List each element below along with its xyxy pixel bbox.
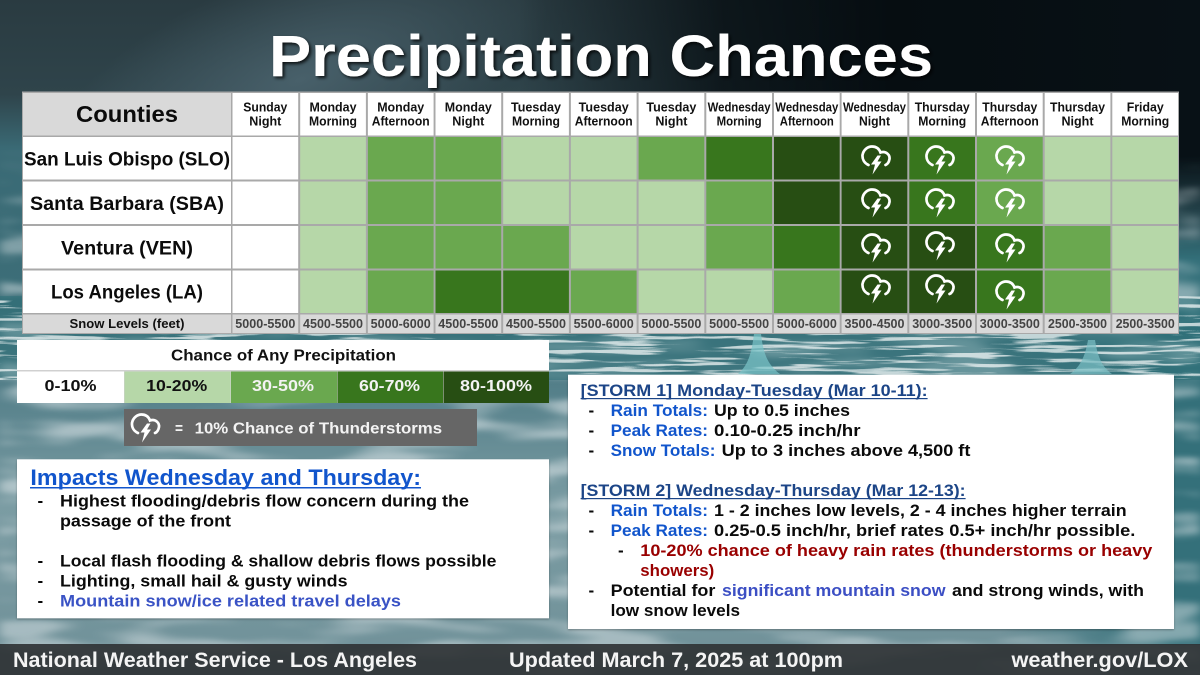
table header row: Night: [249, 115, 282, 129]
row: snow levels: 4500-5500: [506, 317, 566, 331]
row: snow levels: 5500-6000: [574, 317, 634, 331]
footer bar: National Weather Service - Los Angeles: [13, 649, 417, 672]
row: Santa Barbara: [23, 182, 1178, 224]
storm 2 details: 0.25-0.5 inch/hr, brief rates 0.5+ inch/hr possible.: [714, 521, 1135, 540]
storm 2 details: -: [588, 581, 594, 600]
table header row: Wednesday: [775, 101, 838, 115]
table header row: Thursday: [1050, 101, 1105, 115]
table header row: Thursday: [915, 101, 970, 115]
storm 2 details: 10-20% chance of heavy rain rates (thunderstorms or heavy: [640, 541, 1153, 560]
impacts list: Lighting, small hail & gusty winds: [60, 572, 348, 591]
table header row: Friday: [1127, 101, 1164, 115]
table header row: Tuesday: [646, 101, 696, 115]
impacts list: -: [38, 572, 43, 591]
table header row: Morning: [309, 115, 357, 129]
impacts list: [38, 492, 496, 611]
storm 2 details: showers): [640, 561, 714, 580]
legend: chance of any precipitation: 10-20%: [146, 378, 207, 395]
storm 2 details: and strong winds, with: [952, 581, 1144, 600]
table header row: Monday: [310, 101, 357, 115]
row: snow levels: 2500-3500: [1116, 317, 1175, 331]
table header row: Afternoon: [575, 115, 633, 129]
storm 2 details: Potential for: [611, 581, 716, 600]
storm 2 details: [STORM 2] Wednesday-Thursday (Mar 12-13):: [581, 481, 966, 500]
footer bar: [0, 644, 1200, 675]
row: snow levels: 5000-6000: [371, 317, 431, 331]
storm 1 details: -: [588, 441, 594, 460]
storm 2 details: low snow levels: [611, 601, 740, 620]
impacts list: passage of the front: [60, 512, 231, 531]
table header row: [23, 93, 1178, 136]
storm 1 details: Up to 0.5 inches: [714, 401, 850, 420]
legend: thunderstorm icon key: =: [175, 421, 183, 438]
table header row: Morning: [1121, 115, 1169, 129]
impacts list: Highest flooding/debris flow concern during the: [60, 492, 469, 511]
table header row: Night: [655, 115, 688, 129]
footer bar: Updated March 7, 2025 at 100pm: [509, 649, 843, 672]
storm 1 details: [STORM 1] Monday-Tuesday (Mar 10-11):: [581, 381, 928, 400]
panel: impacts Wednesday and Thursday: [17, 459, 549, 618]
storm 2 details: Peak Rates:: [611, 521, 708, 540]
legend: chance of any precipitation: Chance of Any Precipitation: [171, 347, 396, 364]
storm 1 details: [581, 381, 971, 460]
table header row: Wednesday: [708, 101, 771, 115]
storm 1 details: Rain Totals:: [611, 401, 708, 420]
storm 2 details: Rain Totals:: [611, 501, 708, 520]
table header row: Monday: [445, 101, 492, 115]
table header row: Tuesday: [579, 101, 629, 115]
row: Ventura: Ventura (VEN): [61, 238, 193, 259]
storm 1 details: 0.10-0.25 inch/hr: [714, 421, 861, 440]
table header row: Night: [859, 115, 891, 129]
storm 2 details: [581, 481, 1153, 620]
storm 1 details: Snow Totals:: [611, 441, 715, 460]
row: snow levels: 3000-3500: [912, 317, 972, 331]
table header row: Afternoon: [372, 115, 430, 129]
table header row: Wednesday: [843, 101, 906, 115]
row: Los Angeles: Los Angeles (LA): [51, 283, 203, 304]
row: snow levels: 5000-5500: [641, 317, 701, 331]
row: snow levels: 5000-6000: [777, 317, 837, 331]
row: snow levels: 5000-5500: [709, 317, 769, 331]
legend: chance of any precipitation: [17, 340, 549, 403]
legend: thunderstorm icon key: [124, 409, 477, 446]
storm 1 details: Up to 3 inches above 4,500 ft: [722, 441, 971, 460]
row: snow levels: 5000-5500: [235, 317, 295, 331]
storm 2 details: significant mountain snow: [722, 581, 946, 600]
storm 1 details: -: [588, 401, 594, 420]
legend: chance of any precipitation: 80-100%: [460, 378, 532, 395]
row: snow levels: 4500-5500: [438, 317, 498, 331]
row: Santa Barbara: Santa Barbara (SBA): [30, 194, 224, 215]
impacts list: Mountain snow/ice related travel delays: [60, 592, 401, 611]
table header row: Sunday: [243, 101, 287, 115]
legend: chance of any precipitation: 0-10%: [44, 378, 96, 395]
impacts list: -: [38, 492, 43, 511]
storm 1 details: -: [588, 421, 594, 440]
row: Ventura: [23, 226, 1178, 268]
legend: chance of any precipitation: 60-70%: [359, 378, 420, 395]
storm 2 details: -: [618, 541, 624, 560]
legend: thunderstorm icon key: 10% Chance of Thunderstorms: [195, 421, 442, 438]
row: Los Angeles: [23, 270, 1178, 313]
table header row: Night: [452, 115, 485, 129]
table header row: Afternoon: [780, 115, 834, 129]
row: snow levels: 3000-3500: [980, 317, 1040, 331]
panel: storm details: [568, 375, 1174, 629]
storm 2 details: 1 - 2 inches low levels, 2 - 4 inches higher terrain: [714, 501, 1127, 520]
row: snow levels: 2500-3500: [1048, 317, 1107, 331]
table header row: Morning: [918, 115, 966, 129]
row: snow levels: [23, 314, 1178, 333]
row: San Luis Obispo: [23, 137, 1178, 180]
title: Precipitation Chances: [269, 24, 933, 89]
impacts list: -: [38, 552, 43, 571]
precipitation chances table: [22, 92, 1179, 334]
row: snow levels: Snow Levels (feet): [70, 317, 184, 331]
table header row: Thursday: [982, 101, 1037, 115]
table header row: Afternoon: [981, 115, 1039, 129]
storm 2 details: -: [588, 521, 594, 540]
impacts heading: Impacts Wednesday and Thursday:: [30, 465, 421, 490]
row: snow levels: 4500-5500: [303, 317, 363, 331]
legend: chance of any precipitation: 30-50%: [252, 378, 314, 395]
table header row: Morning: [512, 115, 560, 129]
impacts list: Local flash flooding & shallow debris flows possible: [60, 552, 496, 571]
table header row: Monday: [377, 101, 424, 115]
storm 2 details: -: [588, 501, 594, 520]
footer bar: weather.gov/LOX: [1010, 649, 1188, 672]
row: San Luis Obispo: San Luis Obispo (SLO): [24, 150, 230, 171]
table header row: Night: [1062, 115, 1094, 129]
storm 1 details: Peak Rates:: [611, 421, 708, 440]
table header row: Morning: [717, 115, 762, 129]
table header row: Counties: [76, 101, 178, 127]
table header row: Tuesday: [511, 101, 561, 115]
row: snow levels: 3500-4500: [844, 317, 905, 331]
impacts list: -: [38, 592, 43, 611]
